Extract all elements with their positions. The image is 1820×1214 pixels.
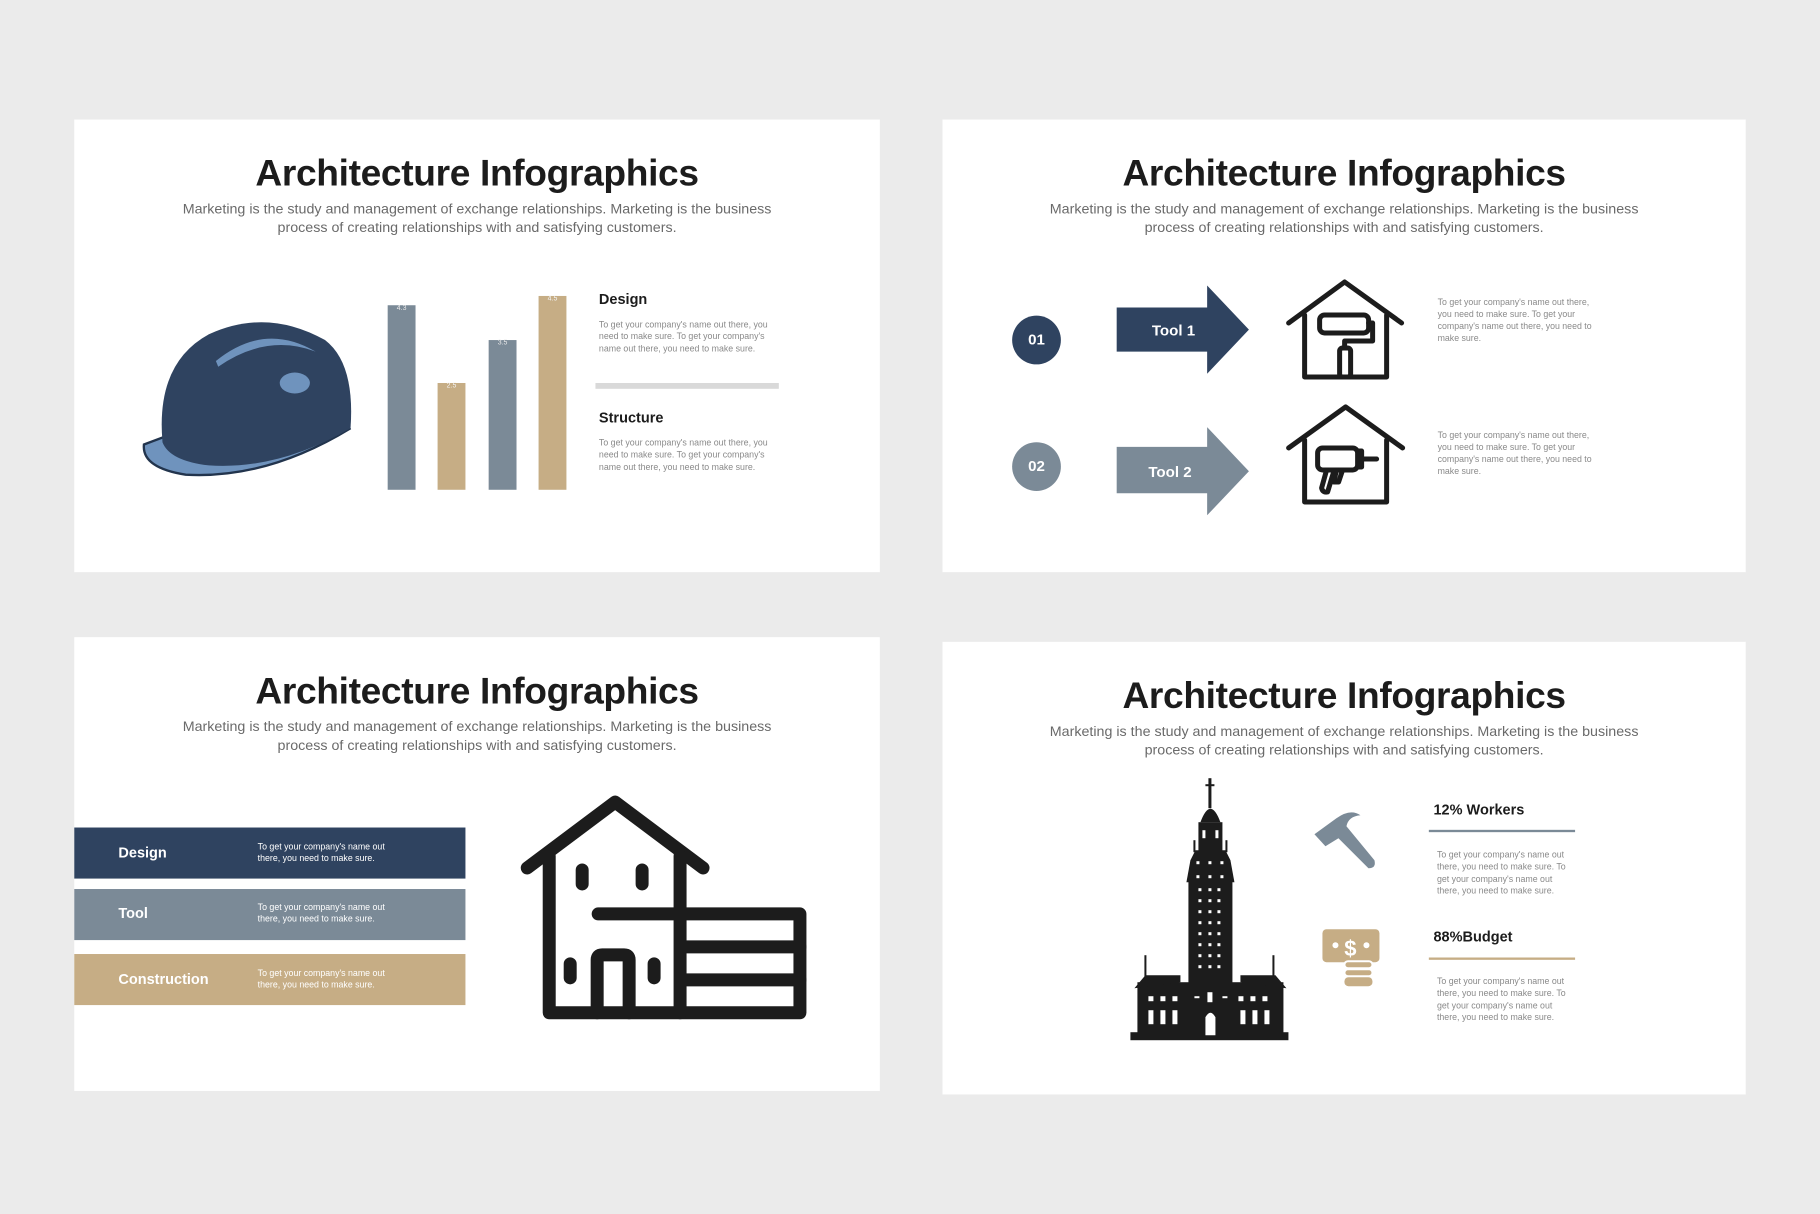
text block: structure: To get your company's name out there, you need to make sure. To get your company's name out there, you need to make sure. (599, 438, 768, 472)
icons: house with roller and house with drill: To get your company's name out there, (1437, 297, 1589, 307)
panel: list with house (74, 637, 880, 1091)
arrow: tool 1 (1116, 286, 1249, 374)
row: construction: To get your company's name out there, you need to make sure. (258, 968, 385, 990)
subtitle: process of creating relationships with and satisfying customers. (278, 219, 677, 235)
arrow: tool 2 (1116, 427, 1249, 515)
subtitle: Marketing is the study and management of exchange relationships. Marketing is the business (1050, 201, 1638, 217)
stat: workers (1428, 802, 1576, 896)
title: Architecture Infographics (255, 152, 699, 194)
row: design: Design (118, 845, 167, 861)
arrow: tool 1: Tool 1 (1152, 322, 1195, 339)
text block: design: To get your company's name out there, you need to make sure. To get your company's name out there, you need to make sure. (599, 319, 768, 354)
subtitle: process of creating relationships with and satisfying customers. (1145, 741, 1544, 757)
row: design: To get your company's name out there, you need to make sure. (258, 841, 385, 863)
badge 02 (1012, 442, 1061, 491)
icons: tower, hammer, money (1130, 778, 1380, 1040)
panel: tools (942, 120, 1746, 572)
row: tool: To get your company's name out there, you need to make sure. (258, 902, 385, 924)
bar 3.5 (489, 340, 517, 490)
icon: money (1322, 929, 1379, 986)
badge 02: 02 (1028, 457, 1045, 475)
badge 01 (1012, 316, 1061, 364)
subtitle: process of creating relationships with and satisfying customers. (1145, 219, 1544, 235)
subtitle: Marketing is the study and management of exchange relationships. Marketing is the business (1050, 723, 1638, 739)
subtitle (183, 201, 771, 235)
badge 01: 01 (1028, 331, 1045, 348)
row: construction: Construction (118, 971, 209, 988)
icons: house with roller and house with drill: To get your company's name out there, (1437, 430, 1589, 440)
bar 2.5: 2.5 (447, 383, 456, 390)
bar 2.5 (438, 383, 465, 490)
subtitle (1050, 201, 1638, 235)
icons: house with roller and house with drill: make sure. (1437, 466, 1481, 476)
stat: budget: 88%Budget (1433, 928, 1512, 945)
subtitle: Marketing is the study and management of exchange relationships. Marketing is the business (183, 201, 771, 217)
stat: budget: To get your company's name out there, you need to make sure. To get your company's name out there, you need to make sure. (1437, 976, 1566, 1022)
subtitle (1050, 723, 1638, 758)
bar 4.5: 4.5 (548, 296, 557, 303)
text block: structure: Structure (599, 410, 663, 426)
icon: house with garage (520, 796, 806, 1020)
text block: structure (599, 410, 768, 472)
icons: house with roller and house with drill: you need to make sure. To get your (1437, 442, 1575, 452)
subtitle: process of creating relationships with and satisfying customers. (278, 736, 677, 753)
bar chart (388, 296, 566, 490)
title: Architecture Infographics (1122, 152, 1566, 194)
icon: hammer (1314, 812, 1374, 868)
title: Architecture Infographics (1122, 674, 1566, 716)
bar 4.5 (539, 296, 566, 490)
title: Architecture Infographics (255, 670, 699, 711)
bar 4.3: 4.3 (397, 305, 406, 312)
panel: tower stats (942, 642, 1746, 1094)
stat: workers: To get your company's name out there, you need to make sure. To get your company's name out there, you need to make sure. (1437, 850, 1566, 896)
arrow: tool 2: Tool 2 (1148, 464, 1192, 481)
bar 3.5: 3.5 (498, 340, 507, 347)
text block: design (599, 291, 768, 354)
stat: budget (1428, 928, 1576, 1022)
row: tool: Tool (118, 905, 148, 922)
subtitle (183, 718, 771, 753)
subtitle: Marketing is the study and management of exchange relationships. Marketing is the business (183, 718, 771, 735)
text block: design: Design (599, 291, 647, 308)
bar 4.3 (388, 305, 416, 490)
row: tool (74, 889, 465, 940)
icon: helmet (142, 322, 352, 476)
stat: workers: 12% Workers (1433, 802, 1524, 818)
panel: helmet chart (74, 120, 880, 572)
icons: house with roller and house with drill: you need to make sure. To get your (1437, 309, 1575, 319)
icons: house with roller and house with drill: company's name out there, you need to (1437, 454, 1591, 464)
icons: house with roller and house with drill: company's name out there, you need to (1437, 321, 1591, 331)
icon: money: $ (1344, 936, 1356, 961)
row: construction (74, 954, 465, 1005)
icons: house with roller and house with drill: make sure. (1437, 333, 1481, 343)
row: design (74, 828, 465, 879)
icons: house with roller and house with drill (1286, 279, 1592, 504)
